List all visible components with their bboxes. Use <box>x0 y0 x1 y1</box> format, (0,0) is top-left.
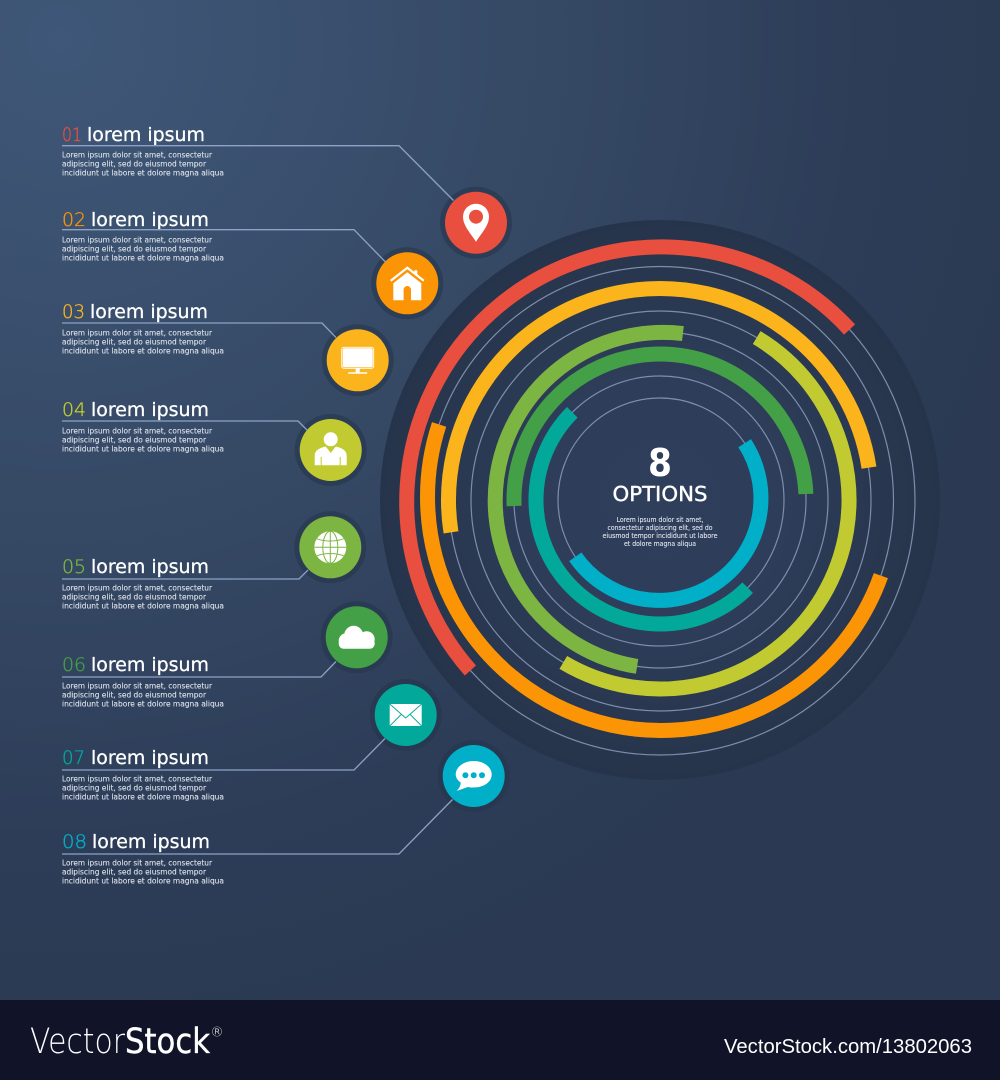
item 08 body: adipiscing elit, sed do eiusmod tempor <box>62 868 207 876</box>
item 05 body: adipiscing elit, sed do eiusmod tempor <box>62 592 207 602</box>
item 05 heading: lorem ipsum <box>91 556 209 578</box>
item 07 body: Lorem ipsum dolor sit amet, consectetur <box>62 774 213 784</box>
item 04 body: adipiscing elit, sed do eiusmod tempor <box>62 436 207 444</box>
item 05 body: incididunt ut labore et dolore magna aliqua <box>62 602 224 610</box>
item 06 body <box>62 682 224 708</box>
footer image id: VectorStock.com/13802063 <box>724 1036 972 1058</box>
item 03 body: Lorem ipsum dolor sit amet, consectetur <box>62 328 213 338</box>
item 01 heading: lorem ipsum <box>87 124 205 146</box>
icon: map pin <box>440 187 512 259</box>
item 07 heading: 07 <box>62 747 85 769</box>
item 05 body <box>62 584 224 610</box>
item 07 heading: lorem ipsum <box>91 747 209 769</box>
item 02 heading: lorem ipsum <box>91 209 209 231</box>
footer logo <box>30 1022 224 1062</box>
footer bar <box>0 1000 1000 1080</box>
item 06 heading: 06 <box>62 654 86 676</box>
item 02 <box>62 209 224 262</box>
item 07 body <box>62 774 224 802</box>
icon: house <box>371 247 443 319</box>
item 03 body <box>62 328 224 356</box>
item 04 body <box>62 426 224 454</box>
item 03 body: adipiscing elit, sed do eiusmod tempor <box>62 338 207 346</box>
item 08 heading: lorem ipsum <box>92 831 210 853</box>
item 06 body: incididunt ut labore et dolore magna aliqua <box>62 700 224 708</box>
center body: Lorem ipsum dolor sit amet, <box>616 516 704 524</box>
center body: consectetur adipiscing elit, sed do <box>608 524 712 532</box>
arc 01 red <box>407 247 850 670</box>
icon: cloud <box>321 601 393 673</box>
item 01 heading: 01 <box>62 124 82 146</box>
item 04 body: Lorem ipsum dolor sit amet, consectetur <box>62 426 213 436</box>
item 03 <box>62 301 224 356</box>
item 06 body: adipiscing elit, sed do eiusmod tempor <box>62 690 207 700</box>
item 05 body: Lorem ipsum dolor sit amet, consectetur <box>62 584 213 592</box>
arc 07 teal <box>536 412 748 624</box>
leader lines <box>62 146 454 854</box>
item 08 heading: 08 <box>62 831 87 853</box>
item 06 <box>62 654 224 708</box>
item 07 body: adipiscing elit, sed do eiusmod tempor <box>62 784 207 792</box>
item 04 body: incididunt ut labore et dolore magna aliqua <box>62 444 224 454</box>
item 01 body: incididunt ut labore et dolore magna aliqua <box>62 168 224 178</box>
item 02 body: adipiscing elit, sed do eiusmod tempor <box>62 244 207 254</box>
icon: monitor <box>322 324 394 396</box>
arc 04 lime <box>563 338 849 689</box>
dark disc <box>380 220 940 780</box>
center heading: OPTIONS <box>612 482 708 506</box>
item 04 heading: lorem ipsum <box>91 399 209 421</box>
item 01 <box>62 124 224 178</box>
arc 02 orange <box>428 424 881 730</box>
arc 08 blue <box>575 443 761 600</box>
arc 05 light green <box>495 332 683 666</box>
item 01 body <box>62 150 224 178</box>
center text block <box>602 441 718 548</box>
item 01 body: adipiscing elit, sed do eiusmod tempor <box>62 160 207 168</box>
item 07 <box>62 747 224 802</box>
item 06 body: Lorem ipsum dolor sit amet, consectetur <box>62 682 213 690</box>
center body: et dolore magna aliqua <box>624 540 696 548</box>
center body <box>602 516 718 548</box>
item 02 body: incididunt ut labore et dolore magna aliqua <box>62 254 224 262</box>
item 05 heading: 05 <box>62 556 86 578</box>
panel: ring chart <box>380 220 940 780</box>
footer logo: Stock <box>125 1022 211 1062</box>
center number: 8 <box>648 441 672 485</box>
item 08 body: incididunt ut labore et dolore magna aliqua <box>62 876 224 886</box>
icon: envelope <box>370 679 442 751</box>
item 01 body: Lorem ipsum dolor sit amet, consectetur <box>62 150 213 160</box>
item 04 heading: 04 <box>62 399 86 421</box>
arc 03 yellow <box>449 289 869 532</box>
item 06 heading: lorem ipsum <box>91 654 209 676</box>
item 02 heading: 02 <box>62 209 86 231</box>
item 03 heading: lorem ipsum <box>90 301 208 323</box>
icon: person <box>295 414 367 486</box>
item 08 <box>62 831 224 886</box>
item 08 body: Lorem ipsum dolor sit amet, consectetur <box>62 858 213 868</box>
arc 06 green <box>514 354 806 506</box>
footer logo: Vector <box>30 1022 126 1062</box>
item 07 body: incididunt ut labore et dolore magna aliqua <box>62 792 224 802</box>
item 03 heading: 03 <box>62 301 85 323</box>
icon: globe <box>294 511 366 583</box>
footer logo: ® <box>210 1026 224 1040</box>
center body: eiusmod tempor incididunt ut labore <box>602 532 718 540</box>
item 03 body: incididunt ut labore et dolore magna aliqua <box>62 346 224 356</box>
item 08 body <box>62 858 224 886</box>
icon: speech bubble <box>438 740 510 812</box>
item 02 body <box>62 236 224 262</box>
item 02 body: Lorem ipsum dolor sit amet, consectetur <box>62 236 213 244</box>
item 04 <box>62 399 224 454</box>
item 05 <box>62 556 224 610</box>
